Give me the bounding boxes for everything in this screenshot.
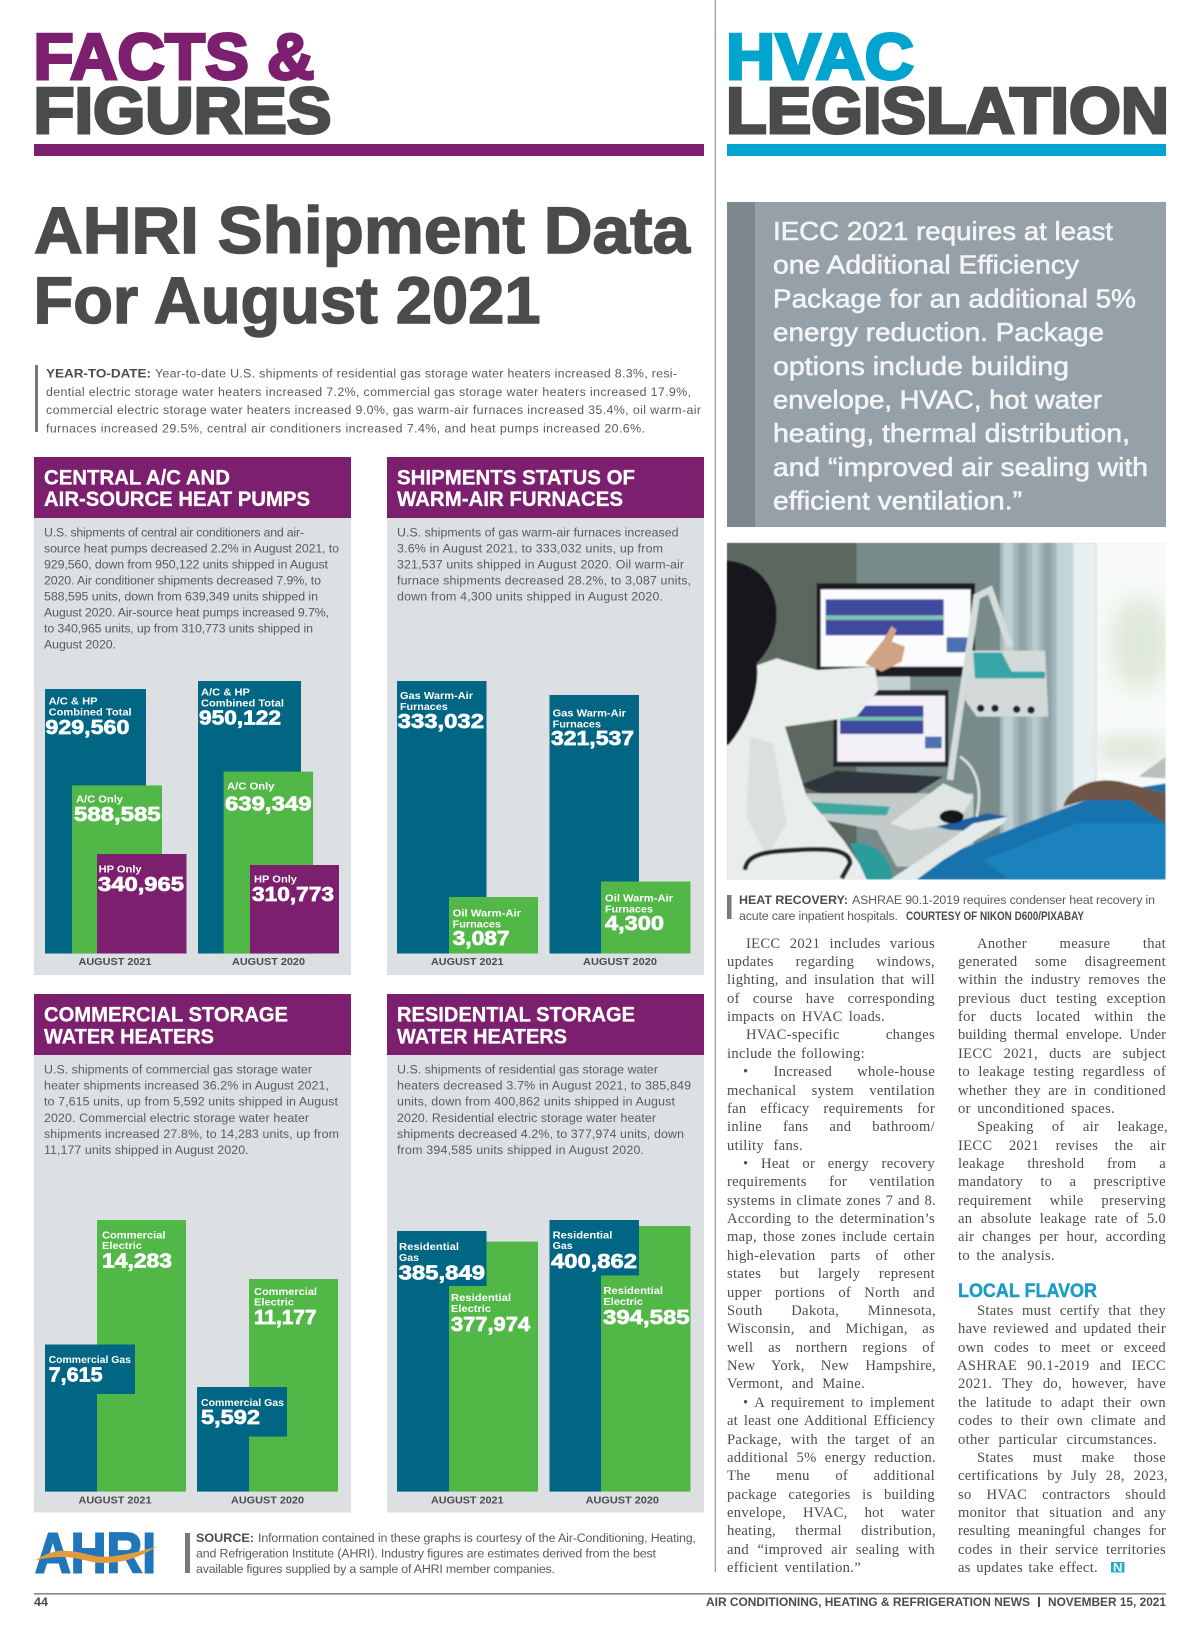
text: resulting meaningful changes for — [958, 1523, 1166, 1539]
panel text: 2020. Commercial electric storage water heater — [44, 1111, 309, 1125]
bar chart: August 2020: 950,122 — [199, 708, 281, 730]
bar chart: August 2020: Gas — [553, 1241, 573, 1252]
icon: AHRI logo: AHRI — [35, 1522, 156, 1586]
title: AHRI Shipment Data: For August 2021 — [34, 263, 540, 337]
text: as updates take effect. — [958, 1560, 1098, 1576]
callout: IECC 2021 pull quote: envelope, HVAC, hot water — [773, 384, 1102, 414]
bar chart: August 2021: Residential — [399, 1242, 459, 1253]
text: air changes per hour, according — [958, 1229, 1166, 1245]
text block: year-to-date summary: dential electric storage water heaters increased 7.2%, commercial gas storage water heaters increased 17.9%, — [46, 385, 691, 399]
text: to leakage testing regardless of — [958, 1064, 1166, 1080]
panel heading: SHIPMENTS STATUS OF — [397, 466, 635, 490]
text: IECC 2021 includes various — [746, 936, 935, 952]
panel text: August 2020. Air-source heat pumps increased 9.7%, — [44, 606, 329, 620]
panel text: 321,537 units shipped in August 2020. Oil warm-air — [397, 558, 684, 572]
panel text: 588,595 units, down from 639,349 units shipped in — [44, 590, 318, 604]
bar chart: August 2021: AUGUST 2021 — [78, 956, 152, 968]
bar chart: August 2020: AUGUST 2020 — [232, 956, 305, 968]
bar chart: August 2021: Gas Warm-Air — [400, 691, 473, 702]
panel text — [397, 1062, 691, 1157]
bar chart: August 2020: 11,177 — [254, 1307, 316, 1329]
panel text: units, down from 400,862 units shipped in August — [397, 1095, 676, 1109]
text block: year-to-date summary — [35, 365, 701, 436]
bar chart: August 2021: Residential — [451, 1293, 511, 1304]
panel text: shipments decreased 4.2%, to 377,974 units, down — [397, 1127, 684, 1141]
panel text: 2020. Air conditioner shipments decreased 7.9%, to — [44, 574, 321, 588]
article text: first column — [727, 936, 936, 1576]
panel heading: AIR-SOURCE HEAT PUMPS — [44, 487, 310, 511]
heading: Facts & Figures: FIGURES — [34, 74, 332, 147]
panel text: U.S. shipments of commercial gas storage water — [44, 1062, 312, 1076]
bar chart: August 2020: AUGUST 2020 — [586, 1494, 659, 1506]
text: previous duct testing exception — [958, 991, 1166, 1007]
bar chart: August 2021: 929,560 — [45, 717, 129, 739]
bar chart: August 2020: A/C & HP — [201, 688, 250, 698]
caption: heat recovery: HEAT RECOVERY: — [739, 893, 848, 907]
bar chart: August 2020: AUGUST 2020 — [583, 956, 657, 968]
bar chart: August 2020: 639,349 — [225, 794, 312, 816]
text: certifications by July 28, 2023, — [958, 1468, 1168, 1484]
bar chart: August 2021 — [397, 681, 538, 968]
callout: IECC 2021 pull quote: one Additional Efficiency — [773, 250, 1079, 280]
bar chart: August 2021: AUGUST 2021 — [431, 956, 504, 968]
panel heading: WATER HEATERS — [44, 1024, 214, 1048]
bar chart: August 2020: 4,300 — [605, 913, 664, 935]
text: and “improved air sealing with — [727, 1542, 935, 1558]
text: 2021. They do, however, have — [958, 1376, 1166, 1392]
footer: folio line: AIR CONDITIONING, HEATING & REFRIGERATION NEWS — [706, 1597, 1030, 1609]
bar chart: August 2020: Gas Warm-Air — [553, 708, 626, 720]
panel heading: WARM-AIR FURNACES — [397, 487, 623, 511]
bar chart: August 2020 — [197, 1279, 338, 1506]
heading: Facts & Figures — [34, 20, 704, 156]
bar chart: August 2021: Electric — [102, 1241, 142, 1252]
caption: heat recovery: ASHRAE 90.1-2019 requires condenser heat recovery in — [852, 893, 1155, 907]
panel text: source heat pumps decreased 2.2% in August 2021, to — [44, 542, 339, 556]
text block: year-to-date summary: furnaces increased 29.5%, central air conditioners increased 7.4%, and heat pumps increased 20.6%. — [46, 422, 645, 436]
panel: commercial storage water heaters — [34, 994, 351, 1512]
clinician — [727, 658, 878, 880]
panel text: 11,177 units shipped in August 2020. — [44, 1143, 249, 1157]
panel: central A/C and air-source heat pumps — [34, 457, 351, 975]
text: upper portions of North and — [727, 1284, 935, 1300]
bar chart: August 2020: AUGUST 2020 — [231, 1494, 304, 1506]
bar chart: August 2020: 5,592 — [201, 1407, 260, 1429]
callout: IECC 2021 pull quote: heating, thermal distribution, — [773, 418, 1130, 448]
bar chart: August 2021: 588,585 — [74, 804, 161, 826]
text: Package, with the target of an — [727, 1432, 935, 1448]
bar chart: August 2021: AUGUST 2021 — [78, 1494, 152, 1506]
bar chart: August 2020: Commercial — [254, 1287, 317, 1298]
panel text — [44, 1062, 339, 1157]
text: generated some disagreement — [958, 954, 1166, 970]
heading: Facts & Figures: FACTS & — [34, 20, 314, 93]
heading: HVAC Legislation: HVAC — [726, 20, 914, 93]
bar chart: August 2020: Oil Warm-Air — [605, 894, 673, 904]
panel text: U.S. shipments of central air conditioners and air- — [44, 526, 304, 540]
text block: year-to-date summary: YEAR-TO-DATE: — [46, 366, 151, 380]
text block: source note: and Refrigeration Institute (AHRI). Industry figures are estimates derived from the best — [196, 1547, 657, 1561]
text: systems in climate zones 7 and 8. — [727, 1193, 936, 1209]
panel heading — [44, 1002, 288, 1048]
text: Vermont, and Maine. — [727, 1376, 865, 1392]
text block: year-to-date summary: commercial electric storage water heaters increased 9.0%, gas warm-air furnaces increased 35.4%, oil warm-air — [46, 403, 701, 417]
panel text: 929,560, down from 950,122 units shipped in August — [44, 558, 329, 572]
panel heading — [397, 466, 635, 511]
text: fan efficacy requirements for — [727, 1101, 935, 1117]
panel: shipments status of warm-air furnaces — [387, 457, 704, 975]
text: impacts on HVAC loads. — [727, 1009, 885, 1025]
text: codes in their service territories — [958, 1542, 1166, 1558]
bar chart: August 2020: Residential — [553, 1230, 613, 1242]
text: Wisconsin, and Michigan, as — [727, 1321, 935, 1337]
text: have reviewed and updated their — [958, 1321, 1166, 1337]
panel text: furnace shipments decreased 28.2%, to 3,087 units, — [397, 574, 691, 588]
text: envelope, HVAC, hot water — [727, 1505, 935, 1521]
bar chart: August 2021: HP Only — [99, 864, 142, 876]
bar chart: August 2020: Commercial Gas — [201, 1398, 284, 1409]
article text: second column — [957, 936, 1168, 1576]
bar chart: August 2021: Combined Total — [49, 708, 132, 718]
text: IECC 2021, ducts are subject — [958, 1046, 1166, 1062]
panel text: to 7,615 units, up from 5,592 units shipped in August — [44, 1095, 339, 1109]
panel heading: RESIDENTIAL STORAGE — [397, 1002, 635, 1026]
bar chart: August 2021: 340,965 — [98, 874, 184, 896]
text: for ducts located within the — [958, 1009, 1166, 1025]
bar chart: August 2020 — [550, 1220, 690, 1506]
text: inline fans and bathroom/ — [727, 1119, 935, 1135]
title: AHRI Shipment Data: AHRI Shipment Data — [34, 193, 691, 267]
callout: IECC 2021 pull quote: options include building — [773, 351, 1069, 381]
text: requirement while preserving — [958, 1193, 1166, 1209]
text: own codes to meet or exceed — [958, 1340, 1166, 1356]
bar chart: August 2020: 400,862 — [551, 1251, 637, 1273]
panel text: U.S. shipments of residential gas storage water — [397, 1062, 658, 1076]
text: at least one Additional Efficiency — [727, 1413, 935, 1429]
bar chart: August 2020: 310,773 — [252, 884, 334, 906]
text: or unconditioned spaces. — [958, 1101, 1115, 1117]
bar chart: August 2021: 7,615 — [49, 1365, 103, 1387]
text: utility fans. — [727, 1138, 803, 1154]
text: include the following: — [727, 1046, 865, 1062]
footer: folio line: 44 — [34, 1595, 48, 1609]
panel text: 2020. Residential electric storage water heater — [397, 1111, 656, 1125]
bar chart: August 2020: Electric — [254, 1298, 294, 1308]
text block: source note — [185, 1531, 696, 1576]
text: package categories is building — [727, 1487, 935, 1503]
desk and equipment — [800, 793, 973, 867]
panel text: heaters decreased 3.7% in August 2021, to 385,849 — [397, 1079, 691, 1093]
footer: folio line — [34, 1593, 1167, 1609]
panel text: 3.6% in August 2021, to 333,032 units, up from — [397, 542, 663, 556]
text: requirements for ventilation — [727, 1174, 935, 1190]
bar chart: August 2021: Gas — [399, 1253, 419, 1264]
bar chart: August 2021 — [397, 1231, 538, 1506]
bar chart: August 2020 — [198, 681, 339, 968]
text block: source note: SOURCE: — [196, 1531, 254, 1545]
text: the latitude to adapt their own — [958, 1395, 1166, 1411]
panel heading: WATER HEATERS — [397, 1024, 567, 1048]
text: South Dakota, Minnesota, — [727, 1303, 936, 1319]
panel text: heater shipments increased 36.2% in August 2021, — [44, 1079, 329, 1093]
icon: end mark N: N — [1113, 1562, 1122, 1574]
panel heading: COMMERCIAL STORAGE — [44, 1002, 288, 1026]
text block: source note: available figures supplied by a sample of AHRI member companies. — [196, 1562, 555, 1576]
bar chart: August 2021: Oil Warm-Air — [453, 908, 521, 920]
callout: IECC 2021 pull quote: efficient ventilation.” — [773, 486, 1022, 516]
text: lighting, and insulation that will — [727, 972, 935, 988]
caption: heat recovery: COURTESY OF NIKON D600/PIXABAY — [906, 909, 1085, 923]
bar chart: August 2021: Electric — [451, 1304, 491, 1315]
text: IECC 2021 revises the air — [958, 1138, 1166, 1154]
panel text: down from 4,300 units shipped in August 2020. — [397, 590, 663, 604]
text: monitor that situation and any — [958, 1505, 1166, 1521]
text: • Increased whole-house — [743, 1064, 935, 1080]
callout: IECC 2021 pull quote: Package for an additional 5% — [773, 283, 1136, 313]
text: • Heat or energy recovery — [743, 1156, 935, 1172]
text block: source note: Information contained in these graphs is courtesy of the Air-Conditioning, Heating, — [258, 1531, 696, 1545]
text: an absolute leakage rate of 5.0 — [958, 1211, 1166, 1227]
text: states but largely represent — [727, 1266, 935, 1282]
photo: clinician at hospital monitors — [727, 543, 1170, 880]
bar chart: August 2021: 385,849 — [399, 1263, 485, 1285]
bar chart: August 2021 — [45, 1220, 186, 1506]
callout: IECC 2021 pull quote: IECC 2021 requires at least — [773, 216, 1114, 246]
text: building thermal envelope. Under — [958, 1027, 1166, 1043]
bar chart: August 2021: AUGUST 2021 — [431, 1494, 504, 1506]
bar chart: August 2020: 394,585 — [603, 1307, 690, 1329]
text: mechanical system ventilation — [727, 1082, 935, 1098]
panel text: from 394,585 units shipped in August 2020. — [397, 1143, 644, 1157]
text: map, those zones include certain — [727, 1229, 935, 1245]
device panel — [965, 651, 1048, 717]
caption: heat recovery: acute care inpatient hospitals. — [739, 909, 898, 923]
icon: end mark N — [1111, 1562, 1124, 1574]
text: codes to their own climate and — [958, 1413, 1166, 1429]
callout: IECC 2021 pull quote: energy reduction. Package — [773, 317, 1104, 347]
panel heading: CENTRAL A/C AND — [44, 466, 230, 490]
heading: HVAC Legislation: LEGISLATION — [726, 74, 1169, 147]
bar chart: August 2020: 321,537 — [551, 728, 634, 750]
text: New York, New Hampshire, — [727, 1358, 936, 1374]
text: other particular circumstances. — [958, 1432, 1157, 1448]
subheading: Local Flavor: LOCAL FLAVOR — [958, 1281, 1097, 1302]
text: leakage threshold from a — [958, 1156, 1166, 1172]
panel heading — [397, 1002, 635, 1048]
text: mandatory to a prescriptive — [958, 1174, 1166, 1190]
bar chart: August 2020: A/C Only — [227, 782, 275, 792]
text: States must certify that they — [977, 1303, 1166, 1319]
callout: IECC 2021 pull quote — [727, 202, 1166, 527]
text: ASHRAE 90.1-2019 and IECC — [957, 1358, 1166, 1374]
text: heating, thermal distribution, — [727, 1523, 936, 1539]
panel text — [44, 526, 339, 652]
panel: residential storage water heaters — [387, 994, 704, 1512]
monitor, upper — [817, 583, 975, 677]
bar chart: August 2021: Commercial Gas — [49, 1355, 131, 1366]
panel text — [397, 526, 691, 604]
panel text: August 2020. — [44, 638, 116, 652]
bar chart: August 2020: Residential — [604, 1286, 663, 1297]
bar chart: August 2021: A/C & HP — [49, 696, 98, 708]
bar chart: August 2021: A/C Only — [76, 794, 123, 806]
text: efficient ventilation.” — [727, 1560, 861, 1576]
monitor, lower — [833, 690, 948, 767]
title: AHRI Shipment Data — [34, 193, 691, 337]
text: According to the determination’s — [727, 1211, 935, 1227]
text: within the industry removes the — [958, 972, 1166, 988]
caption: heat recovery — [727, 893, 1155, 923]
bar chart: August 2021: 14,283 — [102, 1251, 172, 1273]
panel heading — [44, 466, 310, 511]
text: Speaking of air leakage, — [977, 1119, 1168, 1135]
text: well as northern regions of — [727, 1340, 935, 1356]
panel text: to 340,965 units, up from 310,773 units shipped in — [44, 622, 313, 636]
bar chart: August 2021: 3,087 — [453, 928, 510, 950]
text: The menu of additional — [727, 1468, 935, 1484]
text: of course have corresponding — [727, 991, 935, 1007]
text: HVAC-specific changes — [746, 1027, 935, 1043]
bar chart: August 2020: Combined Total — [201, 698, 284, 710]
bar chart: August 2020: Furnaces — [605, 904, 653, 916]
text block: year-to-date summary: Year-to-date U.S. shipments of residential gas storage water heaters increased 8.3%, resi- — [155, 366, 677, 380]
panel text: shipments increased 27.8%, to 14,283 units, up from — [44, 1127, 339, 1141]
text: whether they are in conditioned — [958, 1082, 1166, 1098]
bar chart: August 2021: Furnaces — [400, 702, 448, 713]
text: updates regarding windows, — [727, 954, 935, 970]
bar chart: August 2021: Commercial — [102, 1230, 166, 1242]
text: Another measure that — [977, 936, 1166, 952]
bar chart: August 2020: HP Only — [254, 874, 297, 886]
bar chart: August 2021: 377,974 — [451, 1314, 531, 1336]
heading: HVAC Legislation — [726, 20, 1169, 156]
bar chart: August 2021: Furnaces — [453, 920, 501, 930]
bar chart: August 2021 — [45, 689, 186, 968]
callout: IECC 2021 pull quote: and “improved air sealing with — [773, 452, 1148, 482]
bar chart: August 2021: 333,032 — [398, 711, 484, 733]
text: to the analysis. — [958, 1248, 1055, 1264]
text: high-elevation parts of other — [727, 1248, 935, 1264]
text: additional 5% energy reduction. — [727, 1450, 936, 1466]
text: • A requirement to implement — [743, 1395, 935, 1411]
panel text: U.S. shipments of gas warm-air furnaces increased — [397, 526, 679, 540]
bar chart: August 2020 — [550, 695, 690, 968]
bar chart: August 2020: Furnaces — [553, 720, 601, 730]
patient and bed — [907, 783, 1166, 880]
text: so HVAC contractors should — [958, 1487, 1166, 1503]
footer: folio line: NOVEMBER 15, 2021 — [1048, 1597, 1167, 1609]
bar chart: August 2020: Electric — [604, 1297, 643, 1308]
text: States must make those — [977, 1450, 1166, 1466]
